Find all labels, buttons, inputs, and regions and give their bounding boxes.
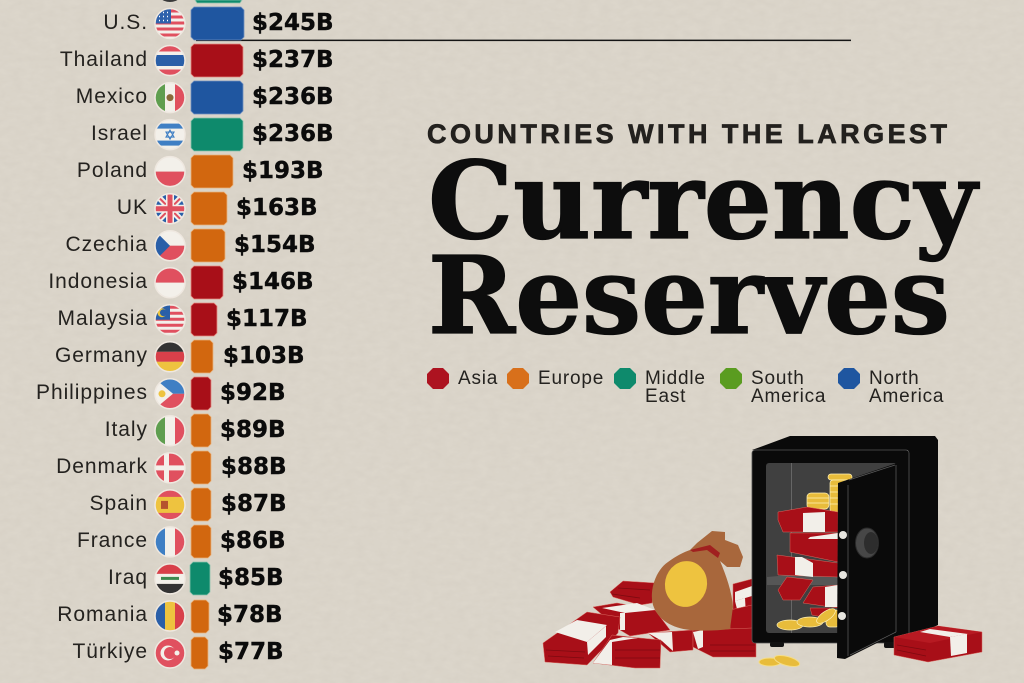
row: U.S.: $245B: [252, 10, 334, 36]
row: Malaysia: $117B: [226, 306, 308, 332]
row: Germany: $103B: [223, 343, 305, 369]
heading: Reserves: Reserves: [428, 234, 950, 359]
row: Israel: Israel: [91, 122, 148, 145]
money stack: front right of centre: [693, 628, 756, 657]
row: U.S.: [103, 7, 334, 40]
row: Italy: [105, 414, 286, 447]
row: Malaysia: [58, 303, 308, 336]
row: Spain: $87B: [221, 491, 287, 517]
legend item: Middle East: [614, 368, 706, 407]
row: UK: [117, 192, 318, 225]
row: Indonesia: Indonesia: [48, 270, 148, 293]
divider line from U.S. bar: [196, 40, 851, 41]
row: Mexico: $236B: [252, 84, 334, 110]
money bag: [652, 531, 743, 631]
row: Türkiye: Türkiye: [72, 640, 148, 663]
row: Thailand: Thailand: [60, 48, 148, 71]
cash in safe: [777, 507, 838, 617]
money stack: behind bag right: [730, 579, 752, 630]
row: U.S.: U.S.: [103, 11, 148, 34]
row: Denmark: [56, 451, 287, 484]
row: Romania: Romania: [57, 603, 148, 626]
legend: [427, 368, 944, 407]
row: Thailand: $237B: [252, 47, 334, 73]
row: France: France: [77, 529, 148, 552]
row: France: [77, 525, 286, 558]
safe body: [752, 436, 938, 648]
legend item: Europe: [507, 368, 604, 389]
row: Indonesia: $146B: [232, 269, 314, 295]
money stack: front centre: [593, 635, 661, 668]
row: Romania: $78B: [217, 602, 283, 628]
row: Romania: [57, 600, 283, 633]
row: Mexico: [76, 81, 334, 114]
row: Philippines: $92B: [220, 380, 286, 406]
legend item: South America: [720, 368, 826, 407]
legend item: North America: America: [869, 386, 944, 407]
row: Türkiye: [72, 637, 284, 669]
heading: Currency: Currency: [428, 139, 980, 264]
money stack: right: [894, 626, 982, 662]
row: Italy: $89B: [220, 417, 286, 443]
row: Indonesia: [48, 266, 314, 299]
legend item: Middle East: East: [645, 386, 686, 407]
legend item: Middle East: Middle: [645, 368, 706, 389]
row: Philippines: [36, 377, 286, 410]
money stack: left front: [543, 612, 620, 665]
row: Malaysia: Malaysia: [58, 307, 148, 330]
row: Germany: [55, 340, 305, 373]
row: France: $86B: [220, 528, 286, 554]
legend item: Europe: Europe: [538, 368, 604, 389]
row: Denmark: Denmark: [56, 455, 148, 478]
legend item: South America: America: [751, 386, 826, 407]
row: Mexico: Mexico: [76, 85, 148, 108]
row: Thailand: [60, 44, 334, 77]
row: Germany: Germany: [55, 344, 148, 367]
row: Israel: $236B: [252, 121, 334, 147]
row: Poland: $193B: [242, 158, 324, 184]
row: Iraq: [108, 562, 284, 595]
legend item: South America: South: [751, 368, 805, 389]
money stack: centre: [648, 630, 693, 652]
safe door: [837, 463, 897, 659]
row: Spain: Spain: [90, 492, 148, 515]
coins in safe: [807, 474, 852, 512]
row: Israel: [91, 118, 334, 151]
legend item: North America: North: [869, 368, 919, 389]
bar: cropped row above U.S.: [155, 0, 242, 3]
row: Iraq: Iraq: [108, 566, 148, 589]
illustration: safe with money and gold: [543, 436, 982, 669]
row: Poland: [77, 155, 324, 188]
row: Denmark: $88B: [221, 454, 287, 480]
row: UK: UK: [117, 196, 148, 219]
row: UK: $163B: [236, 195, 318, 221]
row: Italy: Italy: [105, 418, 148, 441]
heading: kicker: COUNTRIES WITH THE LARGEST: [427, 119, 948, 149]
row: Czechia: Czechia: [65, 233, 148, 256]
row: Philippines: Philippines: [36, 381, 148, 404]
coins on safe floor: [777, 606, 840, 630]
row: Iraq: $85B: [218, 565, 284, 591]
row: Czechia: [65, 229, 316, 262]
row: Spain: [90, 488, 287, 521]
row: Poland: Poland: [77, 159, 148, 182]
gold coins on ground: [759, 653, 801, 669]
row: Türkiye: $77B: [218, 639, 284, 665]
money stack: back left: [610, 581, 655, 605]
legend item: Asia: [427, 368, 498, 389]
legend item: North America: [838, 368, 944, 407]
row: Czechia: $154B: [234, 232, 316, 258]
money stack: centre left: [593, 603, 670, 636]
legend item: Asia: Asia: [458, 368, 498, 389]
